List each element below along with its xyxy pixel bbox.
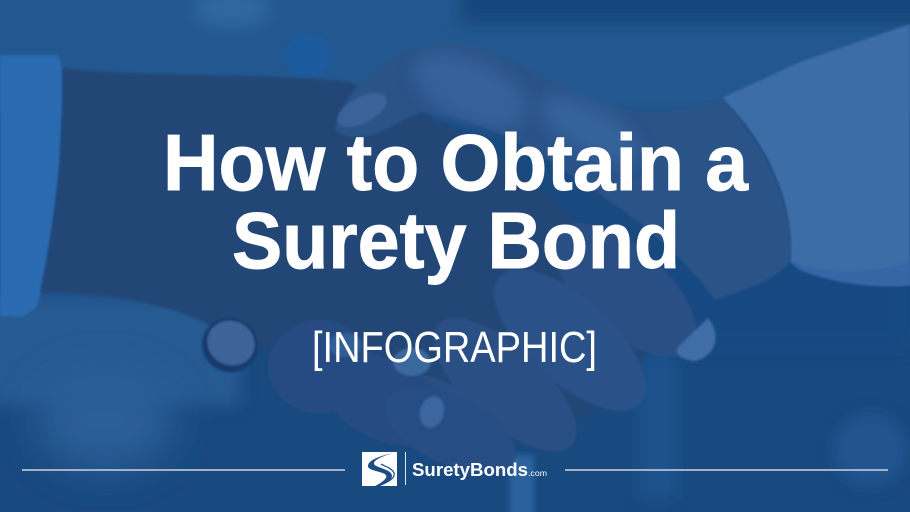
logo wordmark: SuretyBonds	[412, 460, 528, 480]
logo icon: winding road	[362, 452, 397, 489]
handshake	[40, 37, 791, 493]
left divider line	[22, 469, 345, 471]
logo	[362, 452, 547, 489]
fingernails	[193, 309, 716, 431]
shirt cuff lower trim	[790, 262, 910, 286]
right hand and wrist	[335, 42, 791, 300]
left hand fingers	[268, 321, 528, 490]
title: How to Obtain a	[163, 118, 748, 207]
wrist highlight	[531, 83, 649, 177]
thumb highlight	[403, 37, 537, 143]
title	[163, 118, 748, 285]
right divider line	[565, 469, 888, 471]
subtitle: [INFOGRAPHIC]	[312, 323, 597, 372]
left arm and hand	[40, 68, 652, 450]
thumb nail	[332, 86, 392, 134]
logo domain: .com	[528, 468, 547, 478]
left sleeve	[0, 55, 63, 317]
logo separator	[405, 452, 406, 485]
right hand fingers	[380, 200, 719, 493]
right shirt cuff	[722, 24, 910, 286]
title: Surety Bond	[232, 196, 680, 285]
